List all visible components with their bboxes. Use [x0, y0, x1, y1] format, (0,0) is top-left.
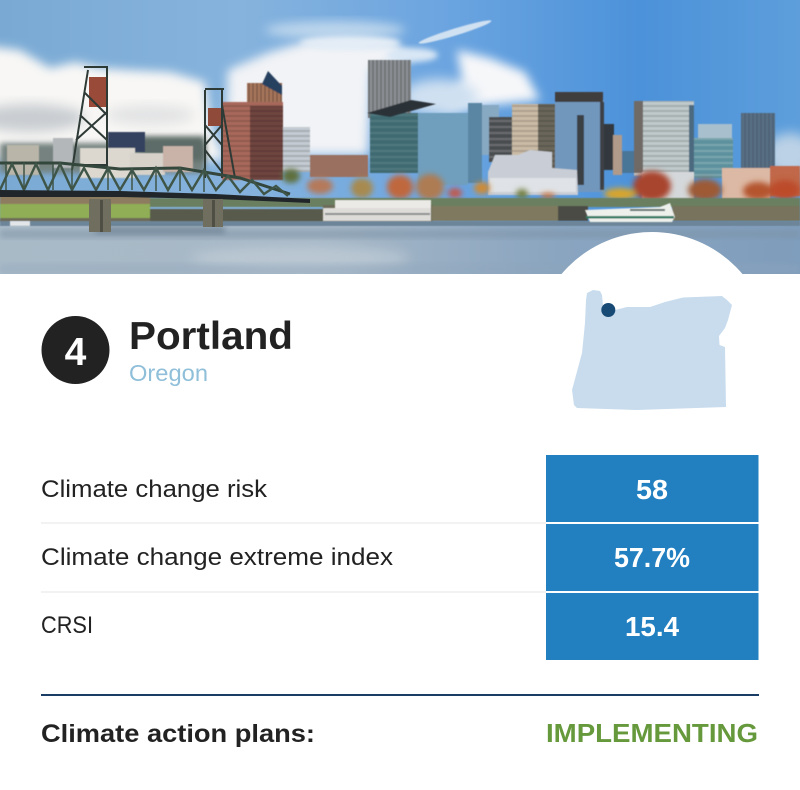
- row: extreme index: 57.7%: [614, 542, 690, 573]
- row: extreme index: [41, 524, 758, 591]
- row: CRSI: CRSI: [41, 612, 93, 639]
- hills: [0, 143, 205, 173]
- brick tower with cap: [246, 82, 283, 103]
- metrics table: [41, 455, 758, 660]
- location dot: [601, 303, 615, 317]
- boats: [10, 200, 675, 226]
- row: climate change risk: Climate change risk: [41, 476, 268, 503]
- climate action status: IMPLEMENTING: [546, 718, 758, 748]
- glass: [418, 113, 468, 185]
- map: Oregon: [572, 290, 732, 410]
- distant buildings: [7, 60, 800, 204]
- lift bridge: [0, 66, 290, 196]
- right block: [604, 124, 614, 170]
- riverbank: [0, 197, 800, 222]
- tan: [511, 104, 539, 156]
- climate action plans label: Climate action plans:: [41, 720, 315, 748]
- state name: Oregon: [129, 360, 208, 386]
- white circular tab behind map: [534, 232, 770, 469]
- rank badge: [42, 316, 110, 384]
- autumn trees: [282, 169, 800, 201]
- row: CRSI: [41, 593, 758, 660]
- row: climate change risk: 58: [636, 474, 668, 505]
- row: climate change risk: [41, 455, 758, 522]
- clouds: [0, 18, 800, 177]
- photo: Portland skyline: [0, 0, 800, 274]
- white low: [488, 150, 578, 195]
- dark tower: [368, 60, 411, 118]
- water: [0, 222, 800, 274]
- row: extreme index: Climate change extreme index: [41, 544, 393, 571]
- rank badge: 4: [65, 331, 87, 374]
- row: CRSI: 15.4: [625, 611, 679, 642]
- city name: Portland: [129, 315, 293, 358]
